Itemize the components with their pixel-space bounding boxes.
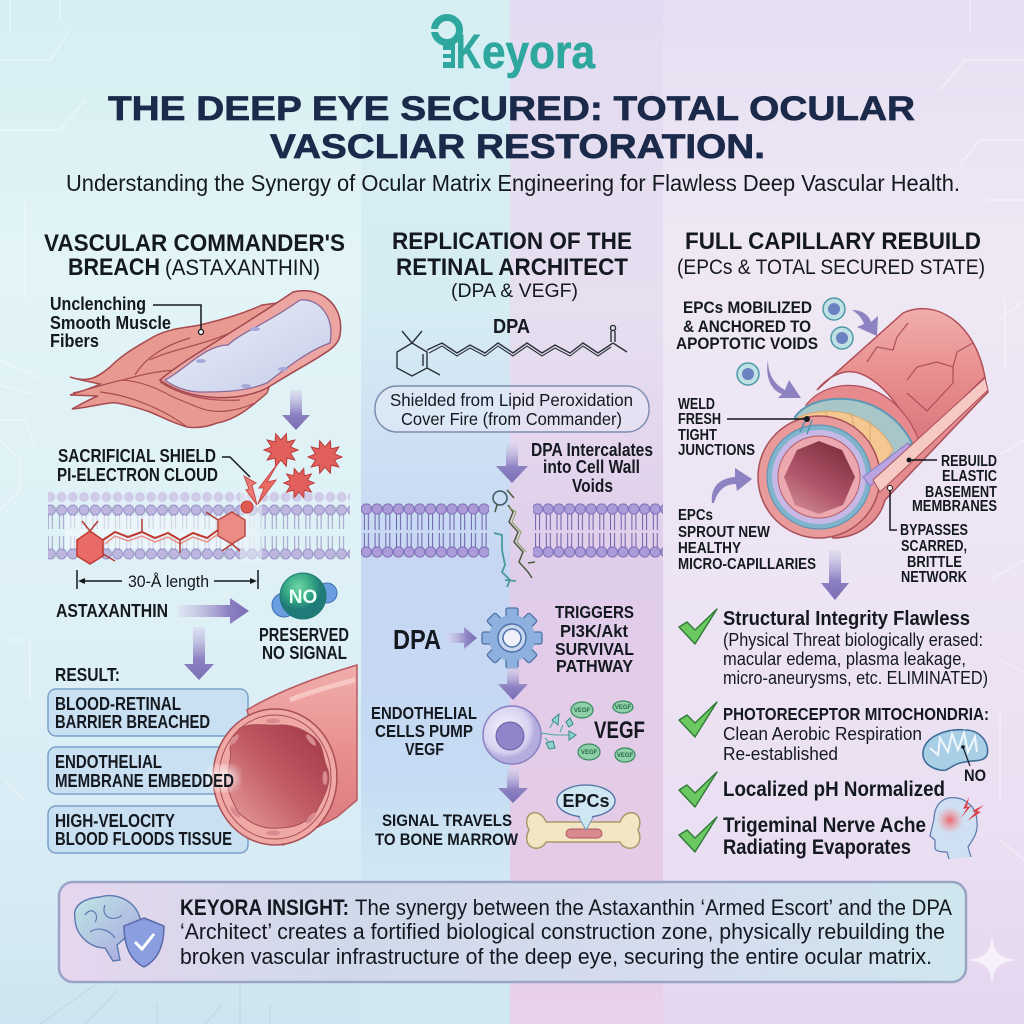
icon: VEGF particles: VEGF	[581, 750, 597, 756]
label: endothelial cells pump VEGF	[371, 703, 477, 759]
label: DPA: DPA	[493, 316, 530, 338]
label: DPA intercalates: DPA Intercalates	[531, 440, 653, 460]
label: unclenching smooth muscle fibers: Smooth Muscle	[50, 313, 171, 333]
insight text	[180, 895, 952, 969]
arrow: EPC to vessel top	[852, 310, 878, 336]
label: EPCs mobilized: & ANCHORED TO	[683, 317, 811, 336]
label: EPCs sprout new healthy micro-capillaries: SPROUT NEW	[678, 524, 770, 541]
label: bypasses scarred brittle network: NETWORK	[901, 569, 968, 586]
checklist item: photoreceptor mitochondria: Clean Aerobic Respiration	[723, 724, 922, 744]
heading: column 1	[44, 230, 345, 281]
text: blood-retinal barrier breached: BLOOD-RETINAL	[55, 694, 181, 714]
label: rebuild elastic basement membranes: REBUILD	[941, 453, 997, 470]
icon: NO molecule: NO	[289, 587, 317, 608]
heading: column 1: BREACH	[68, 254, 160, 281]
title	[108, 90, 915, 166]
label: EPCs sprout new healthy micro-capillaries	[678, 507, 816, 573]
arrow: gear to cell	[498, 667, 528, 700]
icon: DPA molecule	[397, 325, 627, 376]
arrow: EPC to vessel wound	[767, 360, 801, 398]
label: EPCs sprout new healthy micro-capillaries: MICRO-CAPILLARIES	[678, 556, 816, 573]
icon: mitochondrion with NO	[923, 730, 988, 785]
icon: NO molecule	[272, 573, 337, 619]
label: endothelial cells pump VEGF: CELLS PUMP	[375, 721, 473, 741]
label: EPCs sprout new healthy micro-capillaries: HEALTHY	[678, 540, 742, 557]
astaxanthin molecule	[77, 512, 245, 564]
arrow: down to membrane	[496, 443, 528, 483]
text: high-velocity blood floods tissue: BLOOD FLOODS TISSUE	[55, 829, 232, 849]
icon: rebuilt capillary cross-section	[758, 309, 988, 538]
label: unclenching smooth muscle fibers	[50, 294, 204, 351]
label: astaxanthin: ASTAXANTHIN	[56, 600, 168, 621]
label: rebuild elastic basement membranes: MEMBRANES	[912, 498, 997, 515]
label: rebuild elastic basement membranes: ELASTIC	[942, 468, 997, 485]
label: weld fresh tight junctions: FRESH	[678, 411, 721, 428]
text: high-velocity blood floods tissue: HIGH-VELOCITY	[55, 811, 175, 831]
membrane with void	[361, 490, 663, 587]
label: DPA intercalates: into Cell Wall	[543, 457, 640, 477]
label: endothelial cells pump VEGF: ENDOTHELIAL	[371, 703, 477, 723]
icon: bone with EPCs	[527, 785, 640, 848]
icon: bone with EPCs: EPCs	[562, 791, 610, 811]
arrow: down to shield	[282, 390, 310, 430]
dimension: 30-angstrom length: 30-Å length	[128, 572, 209, 591]
callout: shielded from lipid peroxidation	[375, 386, 649, 432]
result box: endothelial membrane background	[48, 747, 248, 794]
label: DPA intercalates: Voids	[572, 476, 613, 496]
label: weld fresh tight junctions: TIGHT	[678, 427, 717, 444]
callout: shielded from lipid peroxidation: Cover Fire (from Commander)	[401, 409, 622, 429]
panel: full capillary rebuild	[676, 228, 997, 859]
arrow: down to result	[184, 627, 214, 680]
checklist item: localized pH	[679, 772, 945, 807]
arrow: DPA to gear	[446, 627, 477, 649]
heading: column 1: (ASTAXANTHIN)	[165, 255, 320, 280]
icon: VEGF particles: VEGF	[615, 705, 631, 711]
label: sacrificial shield: PI-ELECTRON CLOUD	[57, 465, 218, 485]
checklist item: structural integrity	[679, 608, 988, 688]
label: weld fresh tight junctions: JUNCTIONS	[678, 442, 755, 459]
label: EPCs mobilized	[676, 298, 818, 353]
checklist item: structural integrity: micro-aneurysms, etc. ELIMINATED)	[723, 667, 988, 688]
label: sacrificial shield: SACRIFICIAL SHIELD	[58, 446, 216, 466]
label: bypasses scarred brittle network	[888, 486, 968, 586]
label: EPCs mobilized: APOPTOTIC VOIDS	[676, 334, 818, 353]
insight text: broken vascular infrastructure of the deep eye, securing the entire ocular matrix.	[180, 944, 932, 969]
icon: VEGF particles: VEGF	[574, 708, 590, 714]
icon: open blood vessel	[206, 665, 357, 845]
label: EPCs mobilized: EPCs MOBILIZED	[683, 298, 812, 317]
label: preserved NO signal: NO SIGNAL	[262, 642, 347, 663]
label: triggers PI3K/Akt	[555, 602, 634, 676]
checklist item: photoreceptor mitochondria: Re-established	[723, 744, 838, 764]
checklist item: structural integrity: macular edema, plasma leakage,	[723, 648, 966, 669]
label: bypasses scarred brittle network: BRITTLE	[907, 554, 962, 571]
label: preserved NO signal: PRESERVED	[259, 624, 349, 645]
checklist item: trigeminal nerve: Trigeminal Nerve Ache	[723, 814, 926, 837]
text: blood-retinal barrier breached	[55, 694, 210, 732]
label: bypasses scarred brittle network: SCARRED,	[901, 538, 967, 555]
result box: high-velocity blood background	[48, 806, 248, 853]
checklist item: structural integrity: (Physical Threat biologically erased:	[723, 629, 983, 650]
label: triggers PI3K/Akt: TRIGGERS	[555, 602, 634, 622]
heading: column 2: (DPA & VEGF)	[451, 281, 578, 302]
text: endothelial membrane embedded: ENDOTHELIAL	[55, 752, 162, 772]
lipid membrane with astaxanthin	[48, 490, 350, 564]
label: unclenching smooth muscle fibers: Fibers	[50, 331, 99, 351]
label: result: RESULT:	[55, 665, 120, 685]
logo: Keyora	[430, 18, 596, 79]
label: bypasses scarred brittle network: BYPASSES	[900, 522, 968, 539]
icon: mitochondrion with NO: NO	[964, 766, 986, 785]
icon: vessel with smooth muscle fibers	[70, 291, 341, 428]
label: EPCs sprout new healthy micro-capillaries: EPCs	[678, 507, 713, 524]
DPA inserted into void	[493, 490, 535, 587]
checklist item: localized pH: Localized pH Normalized	[723, 778, 945, 801]
heading: column 3: (EPCs & TOTAL SECURED STATE)	[677, 256, 985, 279]
icon: brain and shield	[75, 896, 164, 967]
checklist item: structural integrity: Structural Integrity Flawless	[723, 608, 970, 630]
arrow: vessel to checklist	[821, 550, 849, 600]
subtitle: Understanding the Synergy of Ocular Matrix Engineering for Flawless Deep Vascular Health.	[66, 170, 960, 196]
checklist item: trigeminal nerve	[679, 814, 926, 859]
label: signal travels to bone marrow: SIGNAL TRAVELS	[382, 811, 512, 830]
label: sacrificial shield	[57, 446, 250, 485]
logo: Keyora: K	[456, 26, 481, 79]
dimension: 30-angstrom length	[77, 570, 258, 591]
logo: Keyora: eyora	[482, 25, 596, 78]
arrow: astaxanthin to NO	[178, 598, 249, 624]
label: signal travels to bone marrow	[375, 811, 519, 849]
checklist item: photoreceptor mitochondria: PHOTORECEPTOR MITOCHONDRIA:	[723, 704, 989, 724]
panel: Keyora insight	[59, 882, 966, 982]
checklist item: trigeminal nerve: Radiating Evaporates	[723, 836, 911, 859]
text: high-velocity blood floods tissue	[55, 811, 232, 849]
icon: VEGF particles: VEGF	[617, 753, 633, 759]
insight text: KEYORA INSIGHT:	[180, 895, 349, 920]
icon: EPC cells	[737, 298, 853, 385]
label: unclenching smooth muscle fibers: Unclenching	[50, 294, 146, 314]
checklist item: photoreceptor mitochondria	[679, 702, 989, 764]
insight text: ‘Architect’ creates a fortified biological construction zone, physically rebuilding the	[180, 919, 945, 944]
title: VASCLIAR RESTORATION.	[270, 128, 765, 166]
title: THE DEEP EYE SECURED: TOTAL OCULAR	[108, 90, 915, 128]
label: triggers PI3K/Akt: PATHWAY	[556, 656, 633, 676]
text: endothelial membrane embedded	[55, 752, 234, 791]
text: blood-retinal barrier breached: BARRIER BREACHED	[55, 712, 210, 732]
label: triggers PI3K/Akt: SURVIVAL	[555, 639, 634, 659]
icon: gear PI3K/Akt	[482, 608, 542, 668]
label: endothelial cells pump VEGF: VEGF	[405, 739, 444, 759]
icon: VEGF particles	[571, 701, 635, 762]
panel: vascular commander's breach	[44, 230, 357, 853]
label: preserved NO signal	[259, 624, 349, 663]
heading: column 2	[392, 228, 632, 302]
icon: free radicals and lightning	[241, 434, 342, 513]
heading: column 1: VASCULAR COMMANDER'S	[44, 230, 345, 257]
label: triggers PI3K/Akt: PI3K/Akt	[560, 621, 628, 641]
icon: head with nerve ache	[930, 797, 984, 859]
insight text: The synergy between the Astaxanthin ‘Armed Escort’ and the DPA	[355, 895, 952, 920]
label: DPA second step: DPA	[393, 624, 441, 655]
heading: column 2: RETINAL ARCHITECT	[396, 254, 628, 281]
callout: shielded from lipid peroxidation: Shielded from Lipid Peroxidation	[390, 390, 633, 410]
label: weld fresh tight junctions	[678, 396, 810, 459]
heading: column 3: FULL CAPILLARY REBUILD	[685, 228, 981, 255]
result box: blood-retinal barrier background	[48, 689, 248, 736]
text: endothelial membrane embedded: MEMBRANE EMBEDDED	[55, 771, 234, 791]
decorative sparkle	[967, 935, 1017, 985]
heading: column 2: REPLICATION OF THE	[392, 228, 632, 255]
label: DPA intercalates	[531, 440, 653, 496]
heading: column 3	[677, 228, 985, 279]
arrow: EPCs sprout	[712, 468, 752, 503]
label: weld fresh tight junctions: WELD	[678, 396, 715, 413]
panel: replication of the retinal architect	[361, 228, 663, 849]
label: VEGF: VEGF	[594, 717, 645, 744]
label: rebuild elastic basement membranes: BASEMENT	[925, 484, 997, 501]
arrow: cell to bone marrow	[498, 768, 528, 803]
label: signal travels to bone marrow: TO BONE MARROW	[375, 830, 519, 849]
label: rebuild elastic basement membranes	[906, 453, 997, 515]
icon: endothelial cell	[483, 706, 576, 764]
